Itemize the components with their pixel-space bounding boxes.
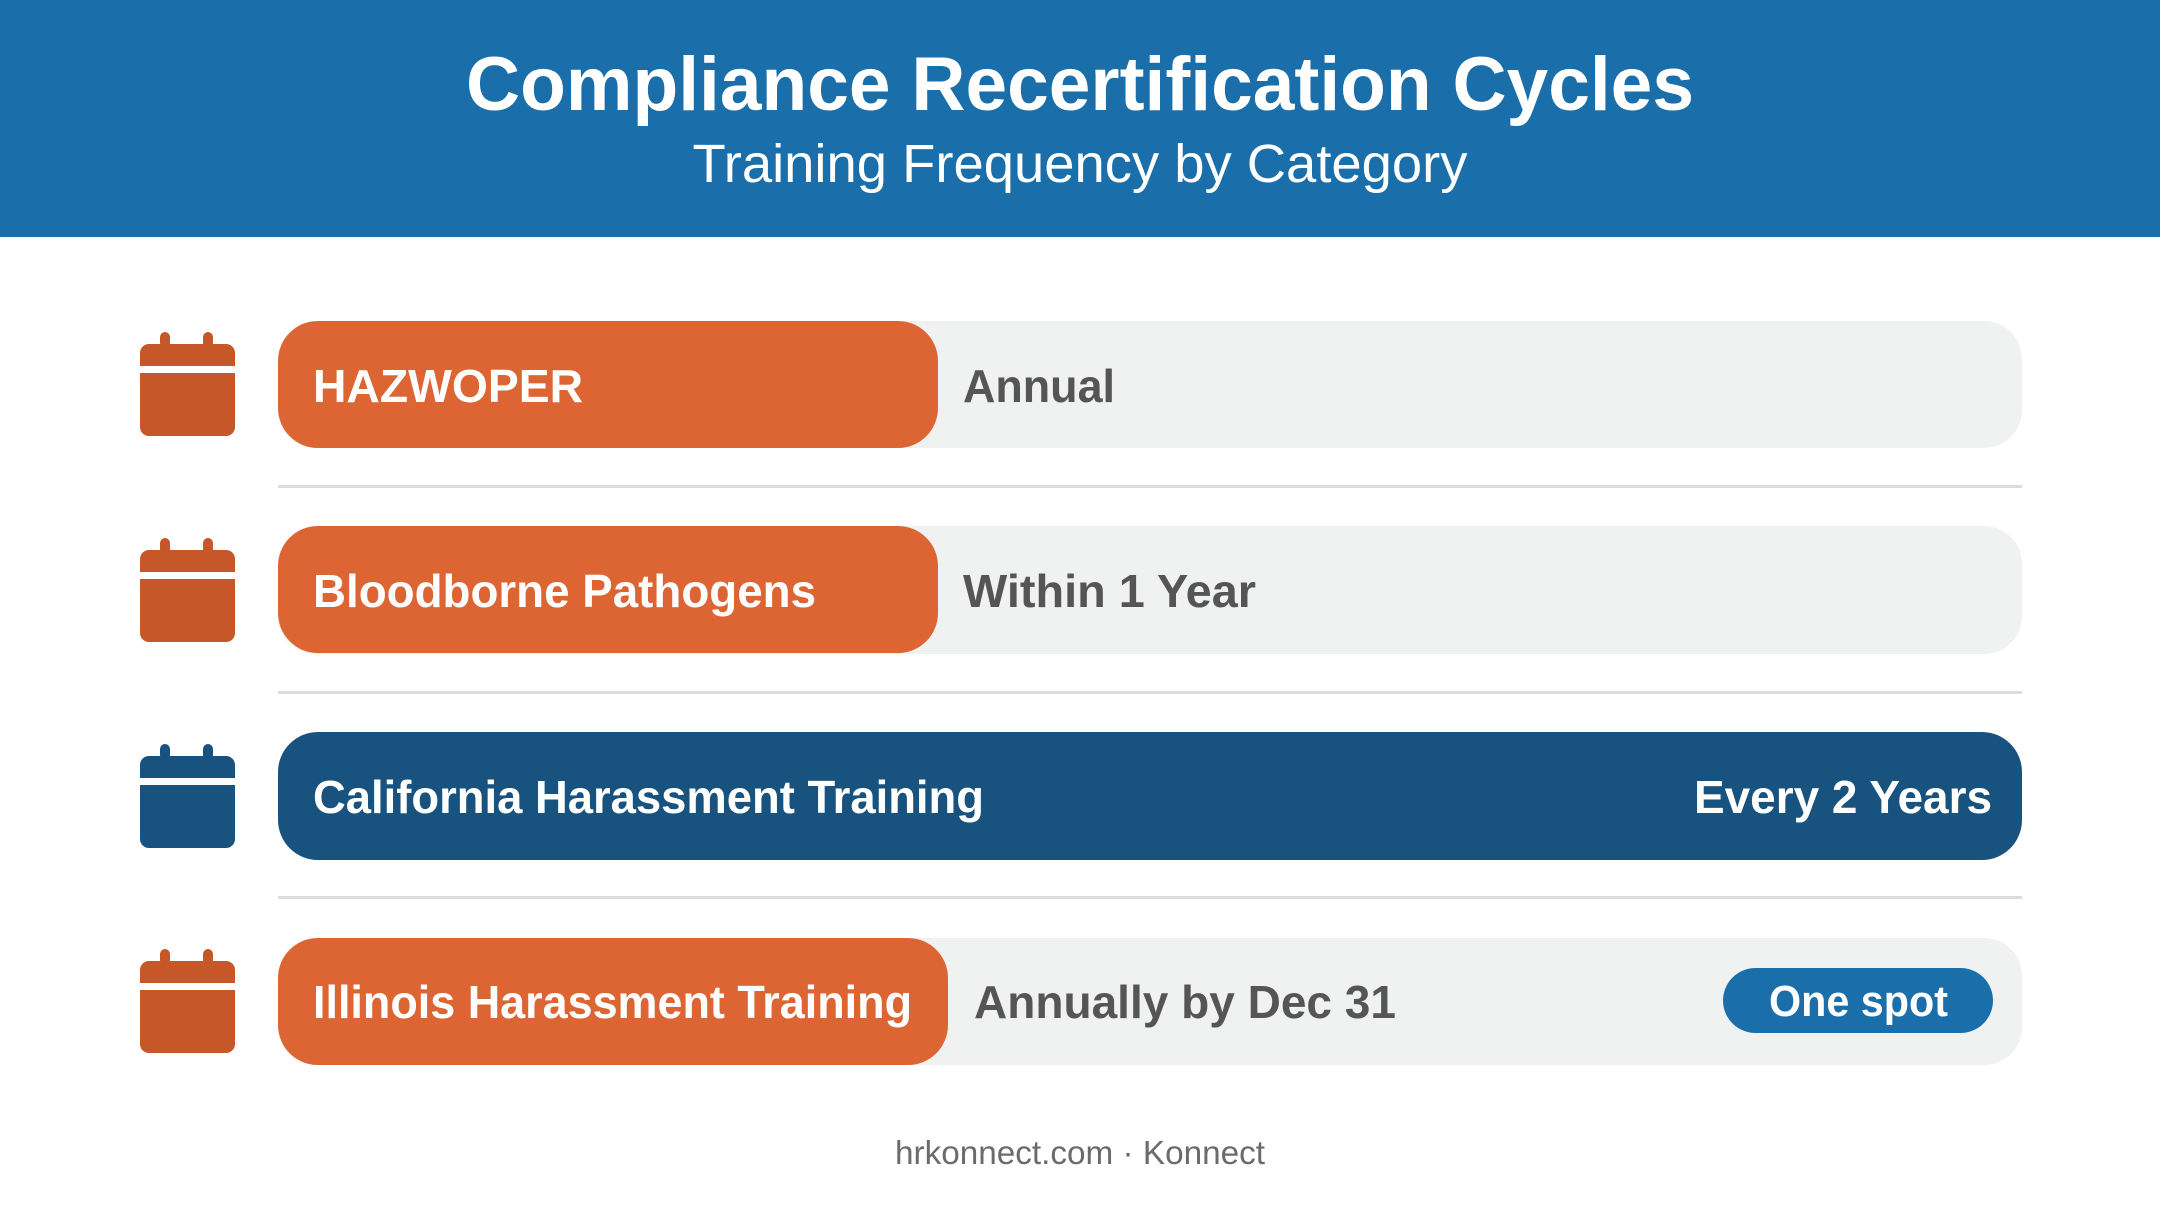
icon: calendar orange — [140, 332, 235, 436]
badge: One spot — [1723, 968, 1993, 1033]
icon: calendar orange — [140, 949, 235, 1053]
category bar — [278, 938, 948, 1065]
label: Bloodborne Pathogens — [313, 565, 816, 617]
track — [278, 526, 2022, 654]
label: HAZWOPER — [313, 360, 583, 412]
icon: calendar navy — [140, 744, 235, 848]
badge: One spot: One spot — [1769, 977, 1948, 1026]
header band — [0, 0, 2160, 237]
frequency: Every 2 Years — [1694, 771, 1992, 823]
label: California Harassment Training — [313, 771, 984, 823]
frequency: Annual — [963, 360, 1115, 412]
row: California Harassment Training — [140, 732, 2022, 860]
subtitle: Training Frequency by Category — [692, 134, 1468, 194]
label: Illinois Harassment Training — [313, 976, 912, 1028]
title: Compliance Recertification Cycles — [466, 42, 1694, 127]
row: Bloodborne Pathogens — [140, 526, 2022, 654]
category bar — [278, 321, 938, 448]
category bar — [278, 526, 938, 653]
row: Illinois Harassment Training — [140, 938, 2022, 1065]
frequency: Within 1 Year — [963, 565, 1256, 617]
row: HAZWOPER — [140, 321, 2022, 448]
track — [278, 321, 2022, 448]
category bar — [278, 732, 2022, 860]
icon: calendar orange — [140, 538, 235, 642]
frequency: Annually by Dec 31 — [974, 976, 1396, 1028]
track — [278, 938, 2022, 1065]
footer source: hrkonnect.com · Konnect — [895, 1134, 1265, 1171]
